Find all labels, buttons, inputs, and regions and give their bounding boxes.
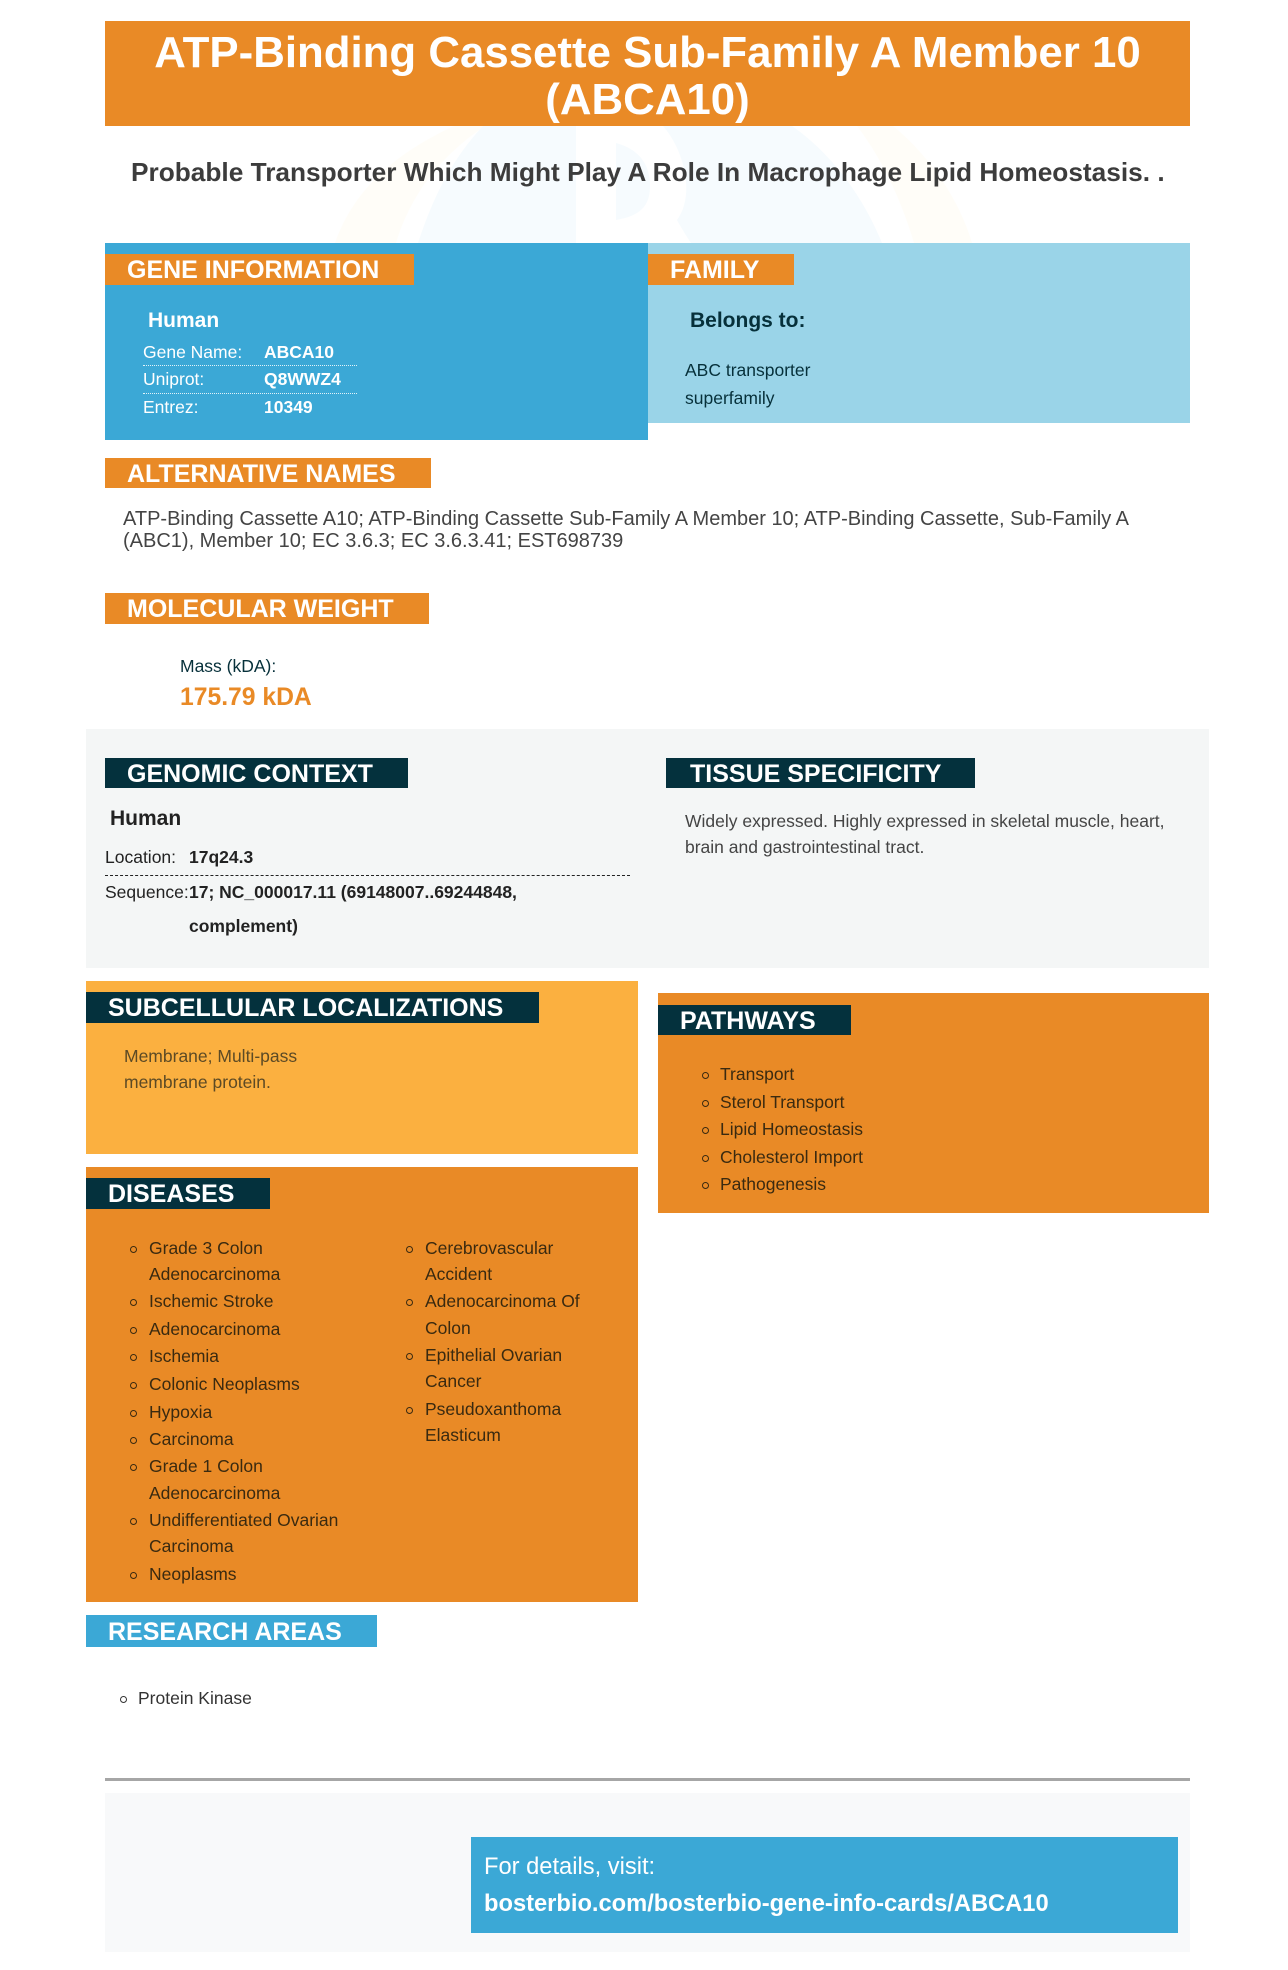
diseases list: column two: Accident xyxy=(425,1264,492,1284)
location row xyxy=(105,847,253,867)
entrez row: 10349 xyxy=(264,397,313,417)
species label: Human xyxy=(110,807,181,830)
heading: genomic context: GENOMIC CONTEXT xyxy=(127,760,373,788)
uniprot row xyxy=(143,369,341,389)
panel: diseases xyxy=(86,1167,638,1602)
panel: family xyxy=(648,243,1190,423)
diseases list: column two: Cancer xyxy=(425,1371,481,1391)
location row: 17q24.3 xyxy=(189,847,253,867)
panel: subcellular localizations xyxy=(86,981,638,1154)
diseases list: column two: Pseudoxanthoma xyxy=(425,1399,561,1419)
diseases list: column one: Grade 1 Colon xyxy=(149,1456,263,1476)
diseases list: column one: Colonic Neoplasms xyxy=(149,1374,300,1394)
diseases list: column one: Adenocarcinoma xyxy=(149,1483,280,1503)
diseases list: column two: Epithelial Ovarian xyxy=(425,1345,562,1365)
diseases list: column one: Ischemia xyxy=(149,1346,219,1366)
pathways list: Pathogenesis xyxy=(720,1174,826,1194)
footer label: For details, visit: xyxy=(484,1854,655,1880)
localization text: membrane protein. xyxy=(124,1072,271,1092)
uniprot row: Q8WWZ4 xyxy=(264,369,341,389)
diseases list: column one: Adenocarcinoma xyxy=(149,1319,280,1339)
sequence row xyxy=(105,882,517,936)
diseases list: column two: Adenocarcinoma Of xyxy=(425,1291,580,1311)
footer panel xyxy=(105,1793,1190,1952)
diseases list: column one: Neoplasms xyxy=(149,1564,237,1584)
heading: subcellular localizations: SUBCELLULAR LOCALIZATIONS xyxy=(108,994,503,1022)
research areas list: Protein Kinase xyxy=(138,1688,252,1708)
species label: Human xyxy=(148,309,219,332)
family text: superfamily xyxy=(685,388,774,408)
watermark logo xyxy=(418,126,882,243)
heading: gene information: GENE INFORMATION xyxy=(127,256,379,284)
diseases list: column two xyxy=(406,1238,580,1445)
gene name row xyxy=(143,342,334,362)
title banner: (ABCA10) xyxy=(545,75,750,124)
diseases list: column one: Ischemic Stroke xyxy=(149,1291,273,1311)
family text xyxy=(685,360,810,408)
sequence row: 17; NC_000017.11 (69148007..69244848, xyxy=(189,882,517,902)
tissue specificity text: brain and gastrointestinal tract. xyxy=(685,837,924,857)
diseases list: column one: Hypoxia xyxy=(149,1402,212,1422)
diseases list: column one: Grade 3 Colon xyxy=(149,1238,263,1258)
mass value: 175.79 kDA xyxy=(180,684,312,711)
diseases list: column two: Cerebrovascular xyxy=(425,1238,553,1258)
heading: research areas: RESEARCH AREAS xyxy=(108,1618,342,1646)
heading: diseases xyxy=(86,1178,270,1209)
tissue specificity text: Widely expressed. Highly expressed in skeletal muscle, heart, xyxy=(685,811,1165,831)
title banner: ATP-Binding Cassette Sub-Family A Member 10 xyxy=(154,28,1141,77)
diseases list: column one: Carcinoma xyxy=(149,1536,234,1556)
pathways list: Sterol Transport xyxy=(720,1092,844,1112)
footer link: bosterbio.com/bosterbio-gene-info-cards/ABCA10 xyxy=(484,1891,1049,1917)
heading: alternative names: ALTERNATIVE NAMES xyxy=(127,460,396,488)
diseases list: column two: Elasticum xyxy=(425,1425,501,1445)
entrez row xyxy=(143,397,313,417)
panel: genomic context and tissue specificity xyxy=(86,729,1209,968)
alternative names text: (ABC1), Member 10; EC 3.6.3; EC 3.6.3.41; EST698739 xyxy=(123,530,623,552)
location row: Location: xyxy=(105,847,176,867)
alternative names text xyxy=(123,508,1129,552)
diseases list: column one: Adenocarcinoma xyxy=(149,1264,280,1284)
heading: family: FAMILY xyxy=(670,256,759,284)
heading: family xyxy=(648,254,794,285)
heading: pathways: PATHWAYS xyxy=(680,1007,816,1035)
diseases list: column two: Colon xyxy=(425,1318,471,1338)
mass label: Mass (kDA): xyxy=(180,656,276,676)
tissue specificity text xyxy=(685,811,1165,857)
pathways list: Lipid Homeostasis xyxy=(720,1119,863,1139)
localization text: Membrane; Multi-pass xyxy=(124,1046,297,1066)
title banner xyxy=(105,21,1190,126)
heading: pathways xyxy=(658,1005,851,1035)
diseases list: column one: Carcinoma xyxy=(149,1429,234,1449)
uniprot row: Uniprot: xyxy=(143,369,204,389)
sequence row: complement) xyxy=(189,916,298,936)
gene name row: Gene Name: xyxy=(143,342,242,362)
heading: diseases: DISEASES xyxy=(108,1180,234,1208)
subtitle: Probable Transporter Which Might Play A Role In Macrophage Lipid Homeostasis. . xyxy=(131,157,1165,187)
diseases list: column one: Undifferentiated Ovarian xyxy=(149,1510,338,1530)
family text: ABC transporter xyxy=(685,360,810,380)
pathways list: Cholesterol Import xyxy=(720,1147,863,1167)
heading: tissue specificity: TISSUE SPECIFICITY xyxy=(690,760,941,788)
belongs to label: Belongs to: xyxy=(690,309,806,332)
pathways list: Transport xyxy=(720,1064,794,1084)
pathways list xyxy=(702,1064,863,1194)
gene name row: ABCA10 xyxy=(264,342,334,362)
panel: gene information xyxy=(105,243,648,440)
sequence row: Sequence: xyxy=(105,882,189,902)
entrez row: Entrez: xyxy=(143,397,198,417)
footer callout xyxy=(471,1837,1178,1933)
heading: molecular weight: MOLECULAR WEIGHT xyxy=(127,595,394,623)
diseases list: column one xyxy=(130,1238,338,1584)
panel: pathways xyxy=(658,993,1209,1213)
localization text xyxy=(124,1046,297,1092)
alternative names text: ATP-Binding Cassette A10; ATP-Binding Cassette Sub-Family A Member 10; ATP-Binding Cassette, Sub-Family A xyxy=(123,508,1129,530)
